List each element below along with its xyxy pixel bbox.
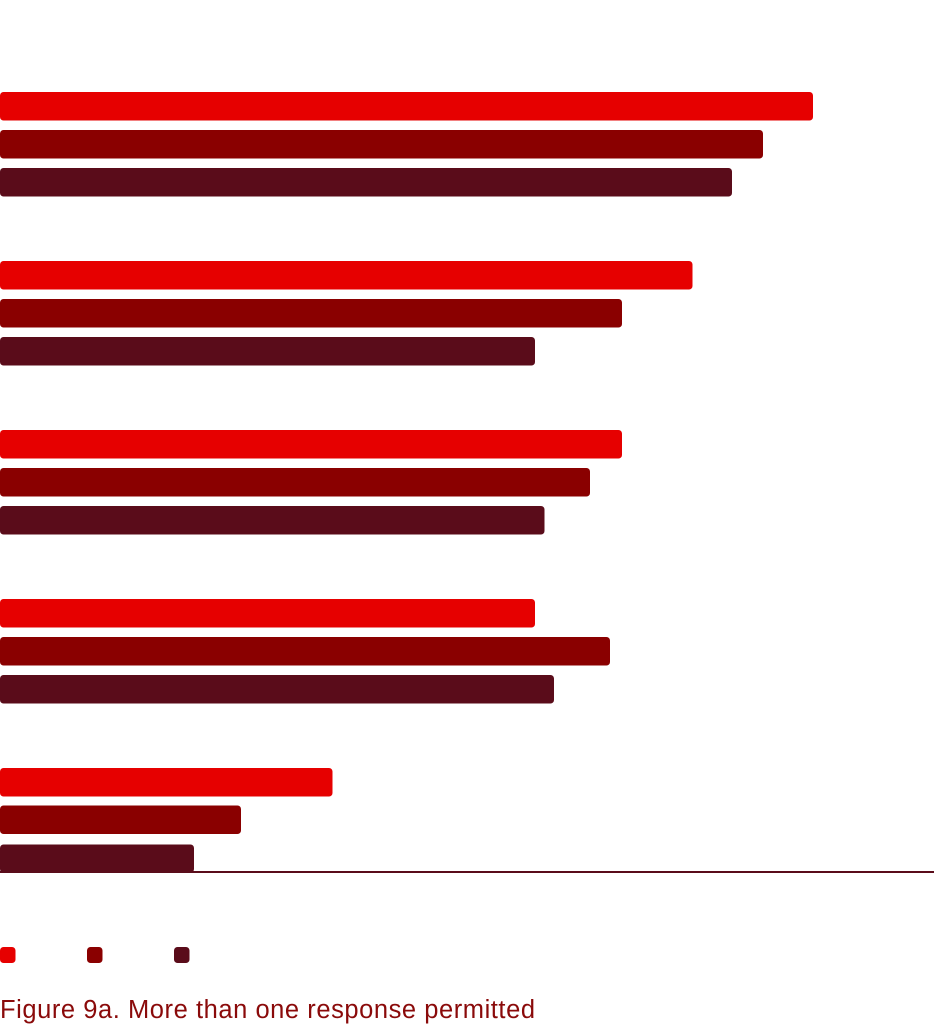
chart baseline axis xyxy=(0,871,934,873)
bar group 1 xyxy=(0,92,813,196)
bar group 3 xyxy=(0,430,622,534)
bar group 2 xyxy=(0,261,692,366)
bar group 4 xyxy=(0,599,610,704)
bar group 5 xyxy=(0,768,332,872)
figure caption: Figure 9a. More than one response permitted xyxy=(0,996,535,1024)
legend swatches xyxy=(0,947,190,963)
